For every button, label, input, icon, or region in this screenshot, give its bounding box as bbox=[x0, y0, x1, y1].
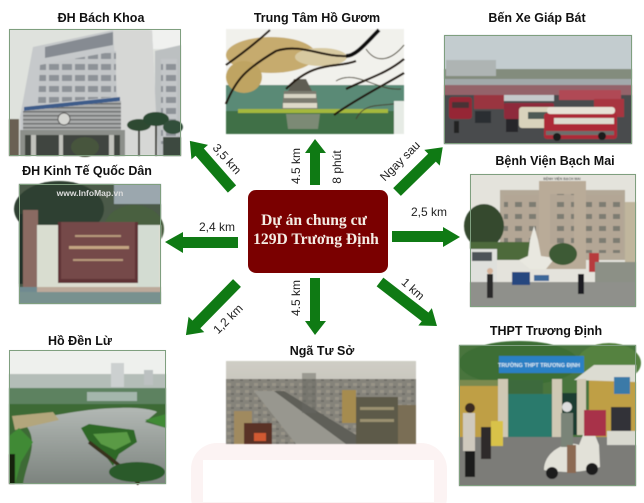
label: 1,2 km: 1,2 km bbox=[210, 301, 246, 337]
arrow: to Hồ Đền Lừ bbox=[178, 275, 245, 343]
heading: THPT Trương Định: THPT Trương Định bbox=[490, 324, 602, 338]
arrow: left to ĐH Kinh Tế Quốc Dân bbox=[165, 232, 238, 253]
heading: Ngã Tư Sở: Ngã Tư Sở bbox=[290, 344, 354, 358]
heading: Bệnh Viện Bạch Mai: Bệnh Viện Bạch Mai bbox=[495, 154, 615, 168]
photo: ĐH Bách Khoa building bbox=[9, 29, 183, 157]
heading: ĐH Kinh Tế Quốc Dân: ĐH Kinh Tế Quốc Dân bbox=[22, 164, 152, 178]
photo: ĐH Kinh Tế Quốc Dân sign bbox=[14, 181, 164, 304]
photo: Ngã Tư Sở overpass bbox=[226, 361, 416, 444]
arrow: to ĐH Bách Khoa bbox=[182, 134, 240, 196]
photo: Bạch Mai hospital: BỆNH VIỆN BẠCH MAI bbox=[543, 176, 581, 181]
label: 2,4 km: 2,4 km bbox=[199, 220, 235, 234]
label: 2,5 km: 2,5 km bbox=[411, 205, 447, 219]
heading: Trung Tâm Hồ Gươm: Trung Tâm Hồ Gươm bbox=[254, 11, 380, 25]
center box: project name bbox=[248, 190, 388, 273]
arrow: right to Bạch Mai bbox=[392, 227, 460, 247]
arrow: to THPT Trương Định bbox=[373, 273, 444, 335]
label: 4.5 km up: 4.5 km bbox=[289, 148, 303, 184]
photo: THPT Trương Định gate bbox=[459, 341, 641, 486]
watermark: InfoMap: www.InfoMap.vn bbox=[56, 188, 123, 198]
photo: Hồ Gươm with turtle tower bbox=[226, 29, 404, 134]
photo: THPT Trương Định gate: TRƯỜNG THPT TRƯƠNG ĐỊNH bbox=[498, 361, 580, 369]
center box: project name: Dự án chung cư bbox=[261, 212, 368, 229]
label: 3,5 km: 3,5 km bbox=[210, 141, 244, 177]
arrow: to Bến Xe Giáp Bát bbox=[389, 139, 450, 200]
label: Ngay sau: Ngay sau bbox=[377, 138, 423, 184]
center box: project name: 129D Trương Định bbox=[253, 231, 379, 248]
photo: Hồ Đền Lừ lake bbox=[9, 350, 166, 484]
heading: Bến Xe Giáp Bát: Bến Xe Giáp Bát bbox=[488, 11, 586, 25]
label: 8 phút: 8 phút bbox=[330, 150, 344, 184]
decorative pink frame at bottom bbox=[191, 443, 447, 503]
photo: Giáp Bát bus station bbox=[444, 35, 632, 144]
heading: Hồ Đền Lừ: Hồ Đền Lừ bbox=[48, 334, 113, 348]
label: 1 km: 1 km bbox=[399, 275, 427, 303]
arrow: up to Hồ Gươm bbox=[305, 139, 326, 185]
label: 4.5 km down: 4.5 km bbox=[289, 280, 303, 316]
arrow: down to Ngã Tư Sở bbox=[305, 278, 326, 335]
heading: ĐH Bách Khoa: ĐH Bách Khoa bbox=[58, 11, 145, 25]
photo: Bạch Mai hospital bbox=[464, 174, 636, 307]
